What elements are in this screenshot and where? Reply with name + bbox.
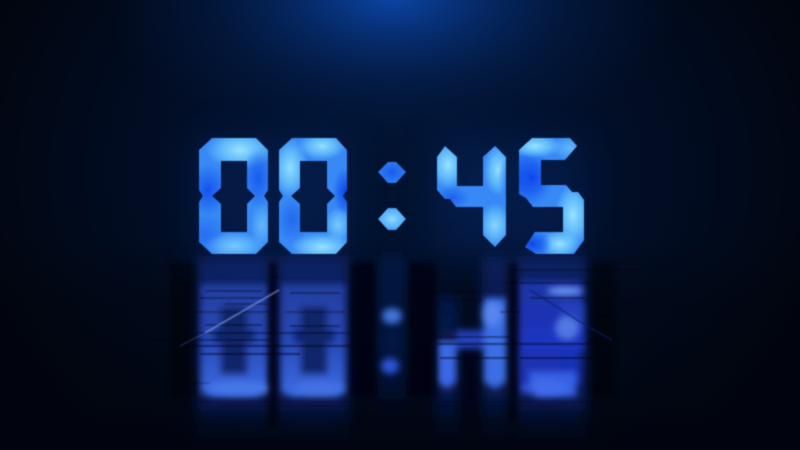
colon separator: :: [372, 117, 413, 255]
floor tile lines: [180, 290, 612, 346]
reflection highlights: [208, 287, 583, 396]
digit: second 0: 0: [275, 107, 351, 286]
floor reflection of the timer: [0, 256, 800, 450]
timer digits: 00:45: [198, 137, 585, 255]
digit glow: [195, 135, 585, 255]
floor streaks: [150, 268, 640, 406]
reflection dark gaps: [170, 262, 616, 427]
digit: 5: 5: [506, 107, 598, 286]
digit: 4: 4: [425, 105, 517, 284]
floor vignette: [0, 395, 800, 450]
digit: first 0: 0: [195, 107, 271, 286]
floor darkening: [0, 240, 800, 450]
reflection haze: [197, 256, 586, 446]
reflected digit blocks: [201, 281, 584, 397]
